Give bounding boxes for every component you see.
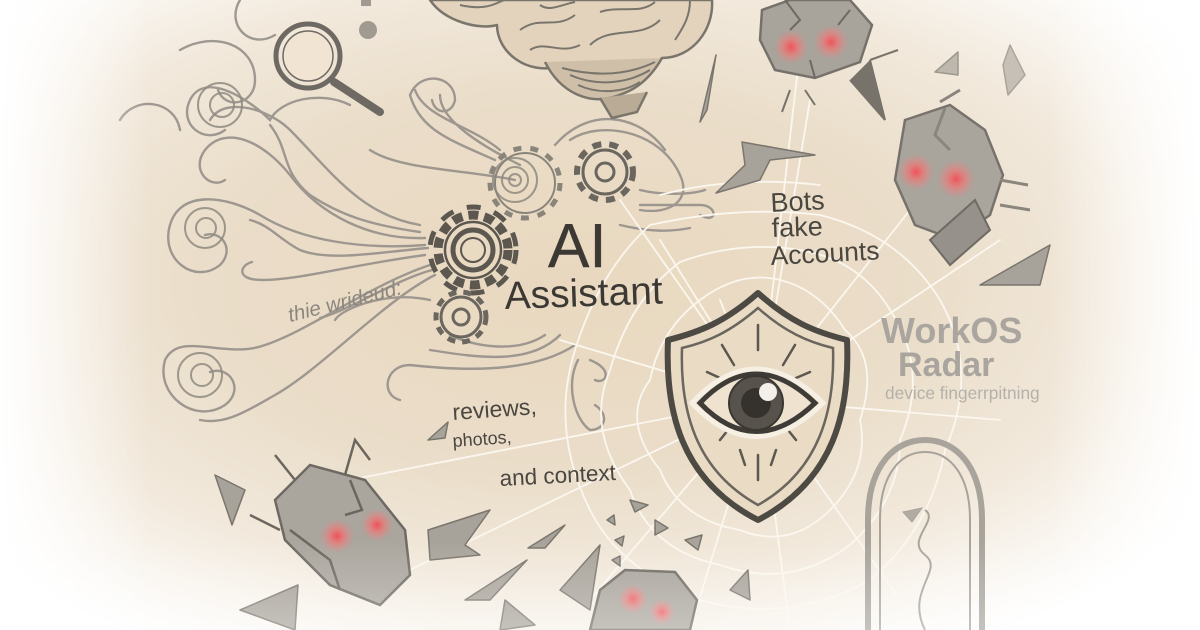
icon: shield with eye <box>668 293 847 520</box>
title: AI Assistant <box>504 212 664 318</box>
label: handwritten left note: thie wrideud: <box>286 276 404 327</box>
gears <box>430 144 633 342</box>
monster: bottom center <box>590 570 697 630</box>
label: Bots fake Accounts: Bots <box>770 185 825 218</box>
icon: portal arch <box>868 440 982 630</box>
monster: right <box>895 90 1030 265</box>
monster: bottom left <box>250 440 410 605</box>
icon: exclamation dots <box>359 0 377 39</box>
label: reviews, photos, and context: photos, <box>452 427 512 451</box>
large gear <box>430 207 516 293</box>
top right gear <box>577 144 633 200</box>
label: Bots fake Accounts: Accounts <box>770 235 880 271</box>
spiral doodles <box>178 83 537 397</box>
white vignette edges <box>0 0 150 630</box>
mid gear <box>490 148 560 218</box>
label: reviews, photos, and context: and context <box>499 460 617 491</box>
web lines around shield <box>350 50 1000 630</box>
label: WorkOS Radar: Radar <box>898 346 994 384</box>
monster: top right <box>760 0 898 120</box>
label: WorkOS Radar <box>881 310 1040 403</box>
title: AI Assistant: Assistant <box>504 269 664 318</box>
label: reviews, photos, and context: reviews, <box>452 393 538 425</box>
icon: magnifying glass <box>276 24 380 112</box>
label: Bots fake Accounts <box>770 185 880 271</box>
small gear bottom <box>436 292 486 342</box>
title: AI Assistant: AI <box>548 212 607 281</box>
swirling lines on the left <box>120 0 714 430</box>
label: WorkOS Radar: WorkOS <box>881 310 1022 351</box>
label: WorkOS Radar: device fingerrpitning <box>885 383 1040 403</box>
label: reviews, photos, and context <box>452 393 617 491</box>
shards and bolts <box>215 45 1050 630</box>
icon: brain <box>430 0 712 118</box>
label: Bots fake Accounts: fake <box>771 211 823 243</box>
